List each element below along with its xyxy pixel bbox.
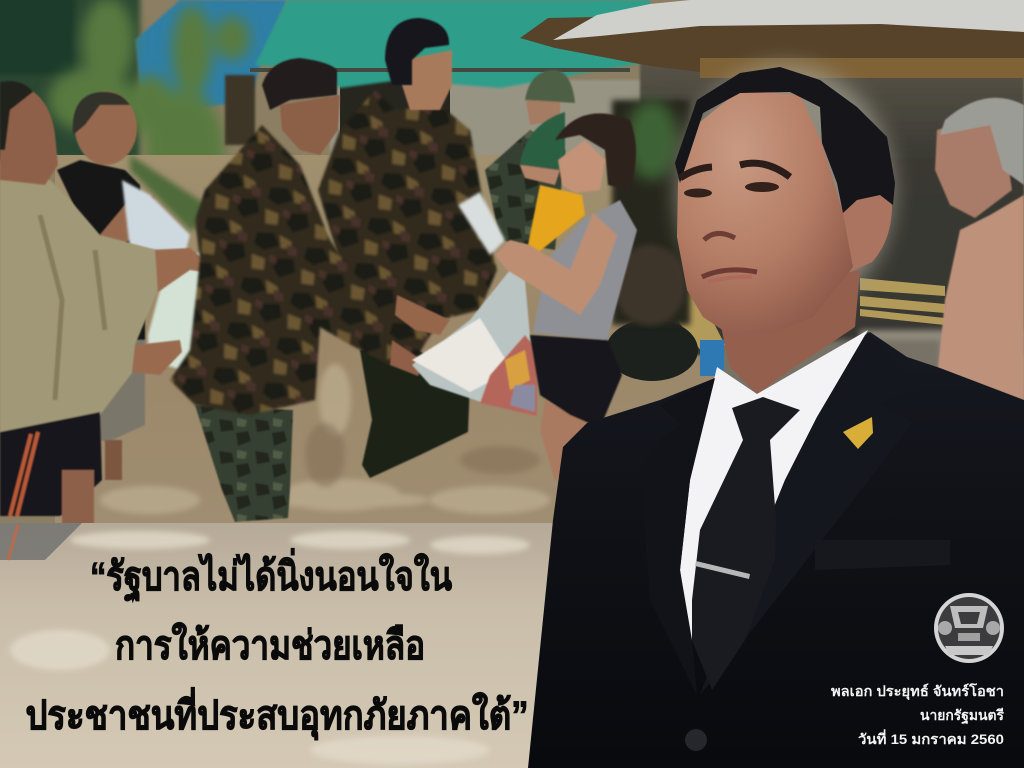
caption: name, title and date: วันที่ 15 มกราคม 2560: [858, 729, 1004, 747]
woman in grey tank top: [495, 113, 637, 482]
quote heading: ประชาชนที่ประสบอุทกภัยภาคใต้”: [26, 687, 528, 741]
shirt: [680, 330, 868, 640]
right lapel: [700, 332, 917, 695]
emblem: government seal: [934, 593, 1004, 663]
nose: [704, 233, 735, 240]
jacket pocket line: [815, 540, 950, 570]
foliage: [0, 0, 140, 160]
foliage in front of tarp: [48, 0, 250, 210]
wall behind: [330, 80, 660, 180]
blue tarp: [135, 0, 287, 110]
house interior right: [640, 55, 1024, 355]
suit jacket: [528, 332, 1024, 768]
text panel backdrop: [0, 523, 558, 768]
bamboo rail: [658, 276, 945, 352]
soldier in beret: [170, 58, 425, 522]
jacket button: [685, 729, 707, 751]
relief bag: upper: [122, 180, 190, 250]
eyes: [684, 182, 779, 198]
gold pin: [843, 417, 873, 449]
caption: name, title and date: พลเอก ประยุทธ์ จันทร์โอชา: [831, 682, 1004, 700]
hair: [675, 67, 895, 213]
left lapel: [640, 378, 715, 695]
quote heading: [26, 548, 528, 741]
tie clip: [695, 561, 750, 579]
person: shirtless elderly man: [935, 98, 1024, 400]
quote heading: “รัฐบาลไม่ได้นิ่งนอนใจใน: [90, 548, 452, 603]
officer in camouflage: [318, 18, 497, 478]
relief bag: lower: [148, 248, 220, 378]
person: man in khaki shirt: [0, 81, 222, 525]
tie: [692, 397, 800, 690]
ear: [838, 194, 892, 272]
caption: name, title and date: [831, 682, 1004, 747]
soldier in back with cap: [485, 70, 575, 250]
relief package: [412, 192, 537, 416]
neck: [715, 270, 860, 394]
eyebrows: [680, 163, 790, 178]
child in yellow wrap: [520, 112, 585, 255]
caption: name, title and date: นายกรัฐมนตรี: [920, 707, 1004, 725]
potted plant: [606, 100, 698, 381]
person: man in black shirt: [57, 91, 155, 480]
halo around the head: [677, 65, 893, 315]
face: [677, 90, 853, 337]
quote heading: การให้ความช่วยเหลือ: [115, 622, 425, 668]
water: [55, 155, 715, 530]
portrait: prime minister: [528, 67, 1024, 768]
mouth: [702, 270, 757, 277]
roof: [520, 8, 1024, 78]
teal tarp: [255, 0, 650, 88]
